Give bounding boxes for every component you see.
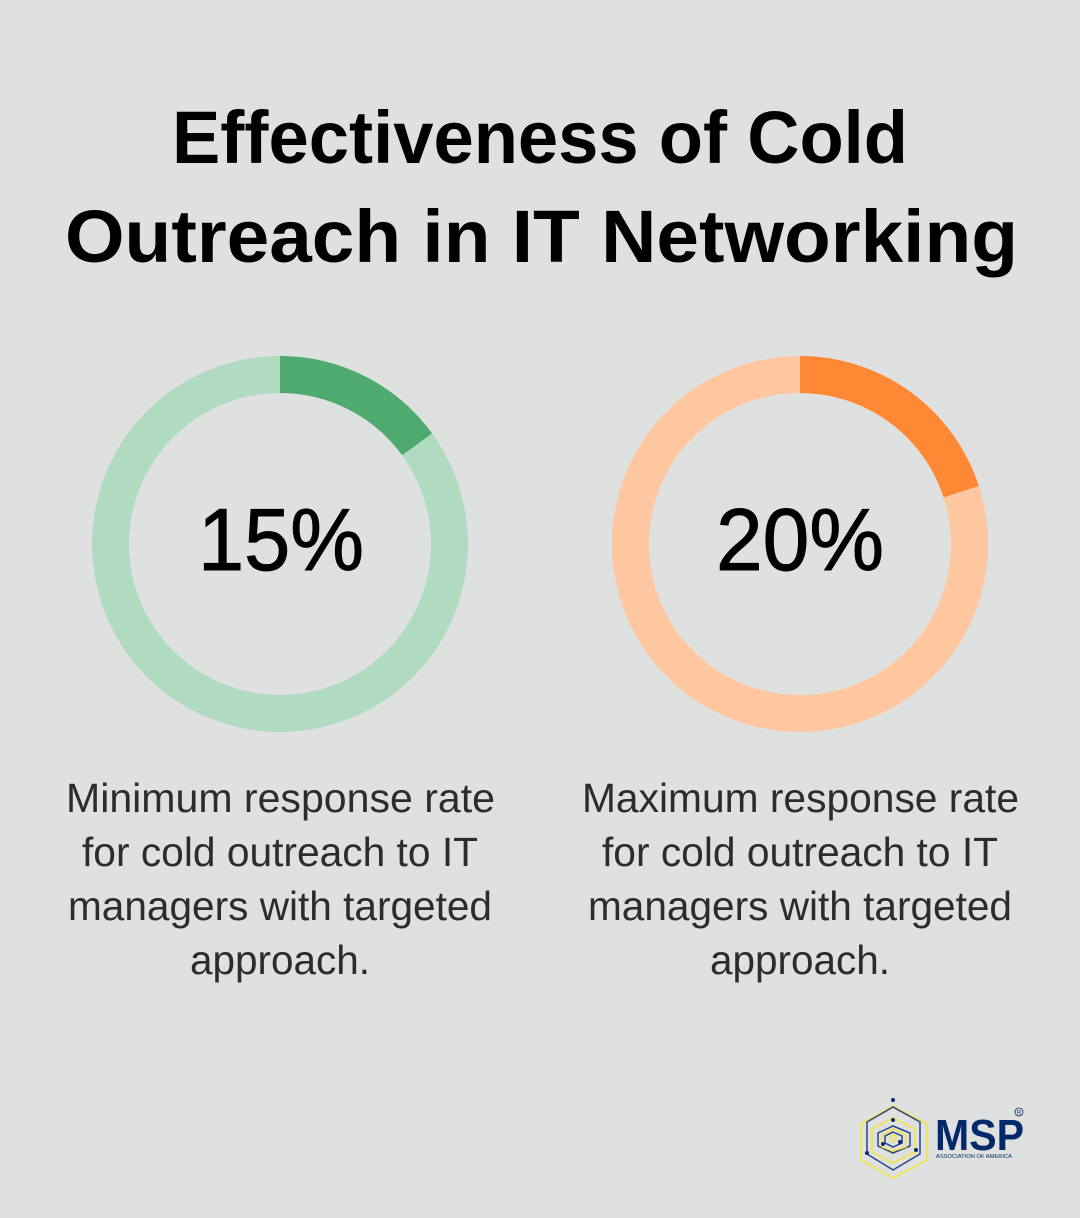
- title: Effectiveness of Cold: [172, 96, 908, 179]
- description: maximum: [582, 775, 1019, 983]
- logo wordmark: MSP: [935, 1111, 1024, 1160]
- panel: maximum response rate: [582, 374, 1019, 983]
- logo tagline: ASSOCIATION OF AMERICA: [936, 1154, 1012, 1160]
- panel: minimum response rate: [66, 374, 495, 983]
- description: minimum: for cold outreach to IT: [82, 829, 478, 875]
- donut chart: 20%: [630, 374, 970, 714]
- title: [65, 96, 1018, 278]
- logo: MSP Association of America: [861, 1098, 1024, 1178]
- description: maximum: managers with targeted: [588, 883, 1012, 929]
- icon: nodes: [865, 1098, 918, 1155]
- description: maximum: for cold outreach to IT: [602, 829, 998, 875]
- description: minimum: Minimum response rate: [66, 775, 495, 821]
- description: minimum: [66, 775, 495, 983]
- value: 20%: 20%: [716, 490, 884, 589]
- title: Outreach in IT Networking: [65, 195, 1018, 278]
- description: maximum: approach.: [710, 937, 890, 983]
- donut chart: 15%: [110, 374, 450, 714]
- description: minimum: managers with targeted: [68, 883, 492, 929]
- description: minimum: approach.: [190, 937, 370, 983]
- value: 15%: 15%: [198, 490, 364, 589]
- registered mark: [1015, 1108, 1023, 1116]
- icon: nested hexagons: [861, 1106, 927, 1178]
- description: maximum: Maximum response rate: [582, 775, 1019, 821]
- registered mark: R: [1017, 1110, 1022, 1116]
